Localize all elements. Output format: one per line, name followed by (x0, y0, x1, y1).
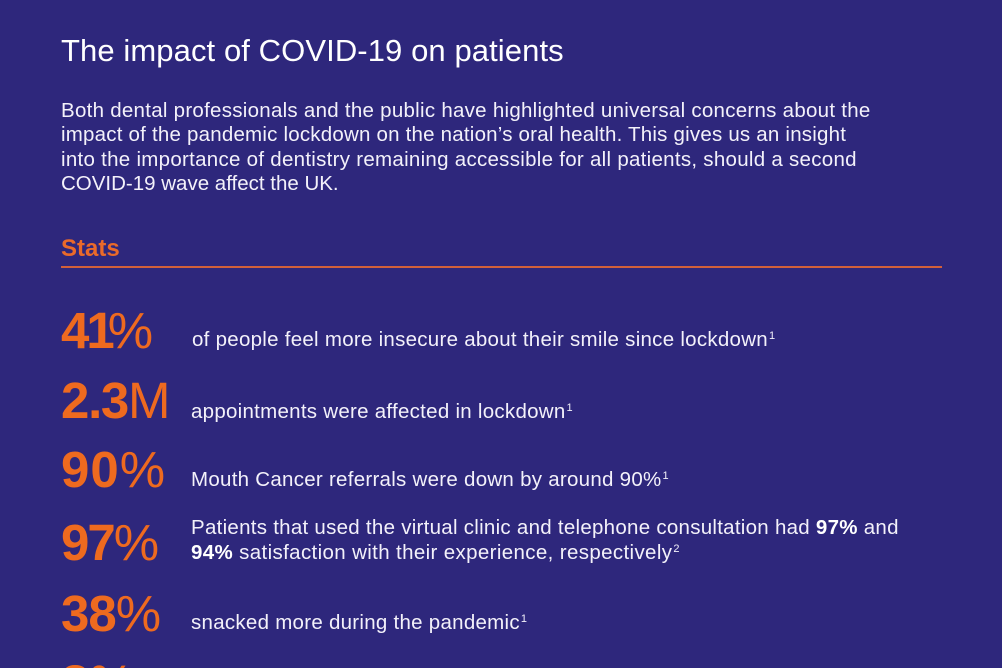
stat: 97% number: 97% (61, 514, 157, 571)
intro text block: COVID-19 wave affect the UK. (61, 172, 339, 195)
intro text block (61, 99, 871, 195)
stat: 2.3M number: 2.3M (61, 372, 169, 429)
stat: 2.3M description: appointments were affected in lockdown1 (191, 400, 573, 423)
stat: 97% description: 94% satisfaction with their experience, respectively2 (191, 540, 679, 564)
intro text block: into the importance of dentistry remaining accessible for all patients, should a second (61, 148, 857, 171)
stat: 90% description: Mouth Cancer referrals were down by around 90%1 (191, 468, 669, 491)
title: The impact of COVID-19 on patients (61, 33, 564, 68)
intro text block: impact of the pandemic lockdown on the nation’s oral health. This gives us an insight (61, 123, 846, 146)
stat: 38% number: 38% (61, 585, 160, 642)
stat: 41% number: 41% (61, 302, 153, 359)
stat: 41% description: of people feel more insecure about their smile since lockdown1 (192, 328, 775, 351)
intro text block: Both dental professionals and the public have highlighted universal concerns about the (61, 99, 871, 122)
stat: 38% description: snacked more during the pandemic1 (191, 611, 527, 634)
stat: 97% description: Patients that used the virtual clinic and telephone consultation had 97% and (191, 516, 899, 539)
stat: 97% description (191, 516, 899, 564)
stat: 90% number: 90% (61, 441, 166, 498)
stats heading: Stats (61, 235, 120, 262)
